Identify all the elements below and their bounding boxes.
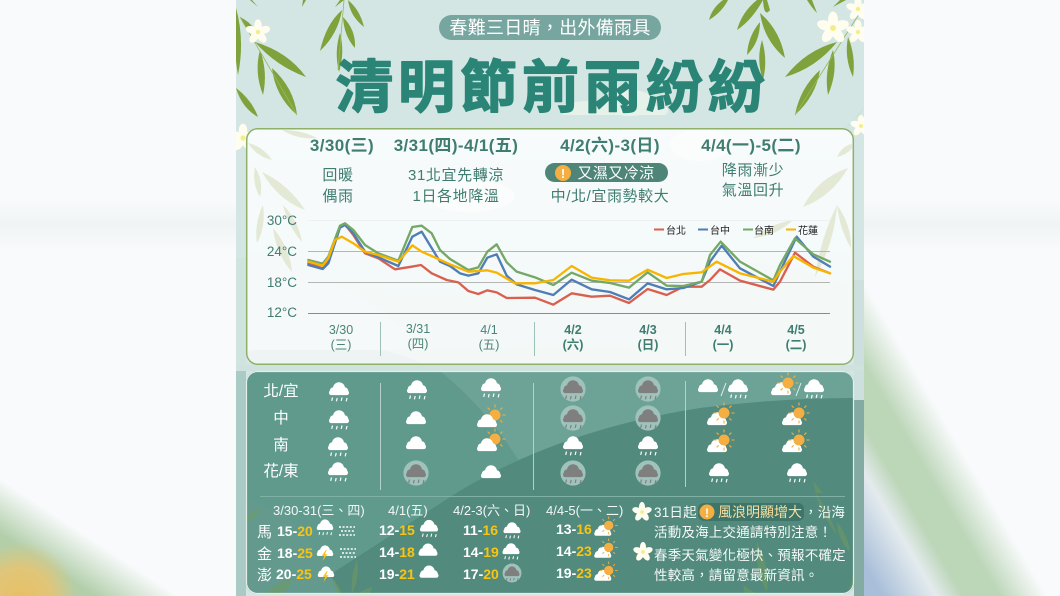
date axis labels: 4/3 [639,323,657,337]
willow leaves: top right [709,0,864,128]
temperature axis labels: 18°C [267,275,297,290]
pale leaves: chart left [248,130,317,272]
period headings: 3/30(三) [310,136,374,155]
warning pill: wet and cold: 又濕又冷涼 [577,165,655,182]
icons: 3/30 [328,382,349,481]
island names: 馬 [257,524,272,541]
table: offshore islands headings: 4/1(五) [388,503,428,518]
temperature axis labels: 30°C [267,213,297,228]
date axis labels: (二) [786,338,806,352]
temperature lines [308,223,830,305]
island temperatures: 20-25 [276,566,312,582]
pale leaves: chart right [753,144,852,277]
translucent leaves inside panel [246,481,854,594]
date axis labels: 3/30 [329,323,353,337]
island temperatures: 12-15 [379,522,415,538]
region labels [263,382,299,480]
temperature axis labels: 12°C [267,305,297,320]
period descriptions [322,162,784,205]
island temperatures: 14-18 [379,544,415,560]
date axis labels: (日) [638,338,658,352]
date axis labels: (六) [563,337,583,352]
island names: 金 [257,546,272,563]
period descriptions: 中/北/宜雨勢較大 [551,187,669,205]
willow leaves: top left [234,0,364,117]
panel: temperature chart [246,128,854,365]
note: changeable weather [632,542,846,583]
period headings: 4/2(六)-3(日) [560,136,660,155]
period headings [310,136,801,155]
chart legend: 台中 [710,224,730,237]
icons: 4/3 [635,376,661,486]
island temperatures [276,524,592,579]
temperature axis labels: 24°C [267,244,297,259]
date axis labels: 3/31 [406,322,430,336]
note: wind and waves [631,502,845,540]
date axis labels: 4/2 [564,323,582,337]
chart legend: 花蓮 [798,224,818,237]
chart legend [654,225,818,235]
period descriptions: 回暖 [322,167,354,184]
region labels: 北/宜 [263,382,299,400]
region labels: 中 [273,409,289,427]
island temperatures: 11-16 [463,522,498,538]
island temperatures: 19-23 [556,565,592,581]
note: wind and waves: 風浪明顯增大 [718,504,802,520]
warning pill: wet and cold: ! [561,166,565,181]
date axis labels: 4/5 [787,323,805,337]
note: changeable weather: 春季天氣變化極快、預報不確定 [654,548,846,563]
note: wind and waves: 31日起 [654,505,697,520]
date axis labels: (一) [713,338,733,352]
island temperatures: 14-19 [463,544,499,560]
title: 清明節前雨紛紛 [336,56,770,120]
date axis labels [329,322,806,352]
island weather icons [317,517,618,582]
line chart [267,213,830,356]
region labels: 花/東 [263,462,299,480]
date axis labels: (三) [331,338,351,352]
island names: 澎 [257,567,272,584]
note: changeable weather: 性較高，請留意最新資訊。 [654,567,818,583]
temperature axis labels [267,213,297,320]
period descriptions: 31北宜先轉涼 [408,167,504,184]
island temperatures: 14-23 [556,543,592,559]
note: wind and waves: ! [705,506,709,520]
icons: 4/2 [560,376,586,486]
panel: regional weather forecast [246,371,854,594]
infographic poster background [228,0,872,596]
warning pill: wet and cold [545,163,668,182]
icons: 4/5 [771,372,824,482]
island temperatures: 18-25 [277,545,313,561]
date axis labels: 4/1 [480,323,498,337]
icons: 3/31 [403,380,429,486]
note: wind and waves: ，沿海 [804,505,845,520]
subtitle pill: 春難三日晴，出外備雨具 [449,18,651,38]
period descriptions: 1日各地降溫 [413,188,499,205]
date axis labels: (四) [408,337,428,351]
period descriptions: 降雨漸少 [722,162,784,179]
table: offshore islands headings: 3/30-31(三、四) [273,503,365,518]
island temperatures: 13-16 [556,521,592,537]
table: offshore islands headings: 4/2-3(六、日) [453,503,530,518]
decorative cloud behind title [560,90,668,116]
date axis labels: 4/4 [714,323,732,337]
island names [258,525,272,582]
date axis labels: (五) [479,338,499,352]
period descriptions: 偶雨 [322,188,354,205]
flowers on poster [228,0,872,152]
table: offshore islands headings [273,503,623,518]
island temperatures: 15-20 [277,523,313,539]
note: wind and waves: 活動及海上交通請特別注意！ [654,524,832,540]
icons: 4/4 [698,379,748,482]
island temperatures: 19-21 [379,566,415,582]
chart legend: 台南 [754,224,774,237]
icons: 4/1 [477,378,506,478]
period headings: 3/31(四)-4/1(五) [394,136,518,155]
chart legend: 台北 [666,224,686,237]
period descriptions: 氣溫回升 [722,182,784,199]
table: offshore islands headings: 4/4-5(一、二) [546,503,623,518]
island temperatures: 17-20 [463,566,499,582]
region labels: 南 [273,436,289,454]
period headings: 4/4(一)-5(二) [701,136,801,155]
